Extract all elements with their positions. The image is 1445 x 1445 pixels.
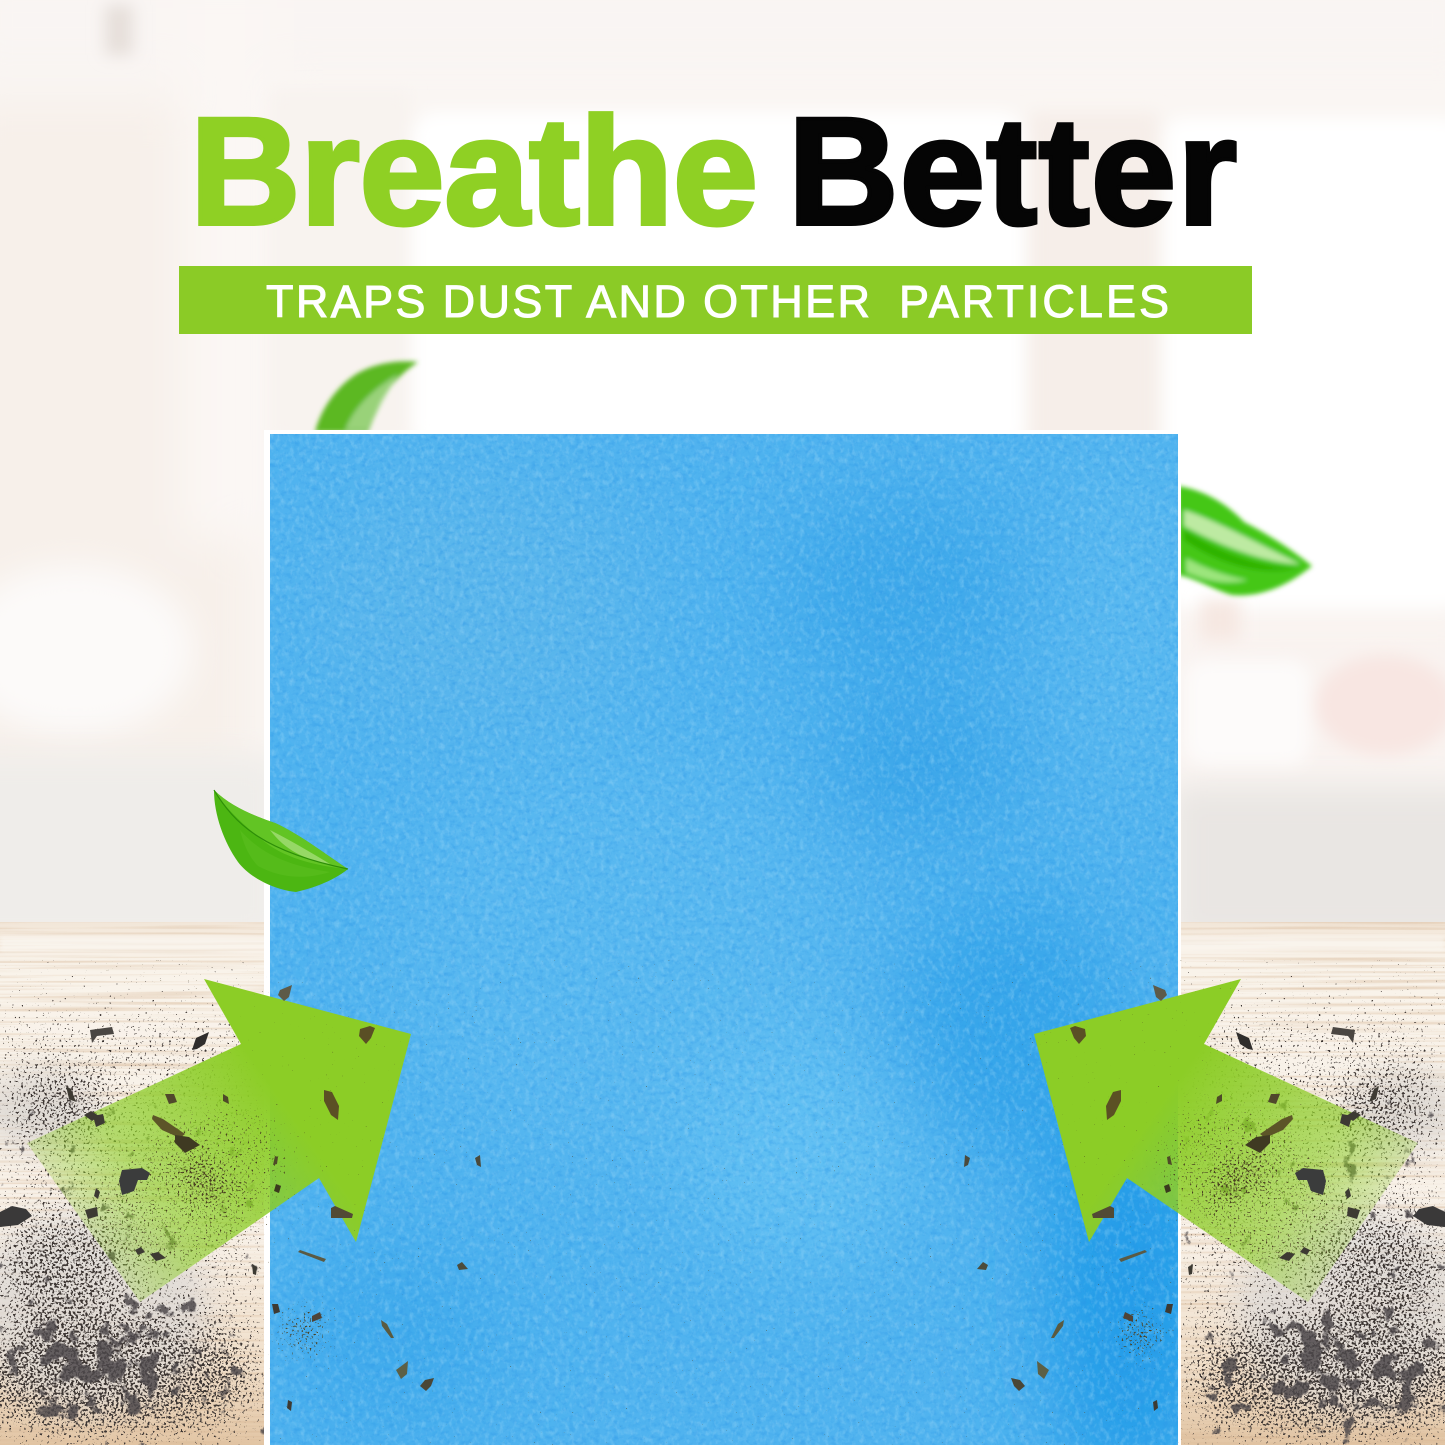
dust specks on table (0, 1010, 1445, 1445)
title word: Better: Better (788, 86, 1237, 257)
title (190, 86, 1237, 257)
large debris flakes right (964, 985, 1445, 1411)
subtitle banner: TRAPS DUST AND OTHER (266, 276, 870, 327)
large debris flakes left (0, 985, 481, 1411)
leaf: top left blurred (315, 361, 418, 432)
particles over arrows and panel (0, 985, 1445, 1411)
pale dust haze (0, 1070, 1445, 1410)
title word: Breathe: Breathe (190, 86, 758, 257)
blurred pillow left (0, 565, 193, 735)
subtitle banner: PARTICLES (899, 276, 1169, 327)
product: blue filter panel (264, 430, 1215, 1445)
leaf: left sharp (214, 790, 348, 892)
leaf: right blurred (1178, 486, 1312, 595)
wooden table with dust (0, 922, 1445, 1445)
arrow: right pointing into filter (1034, 979, 1418, 1302)
arrow: left pointing into filter (27, 979, 411, 1302)
soot clumps on table (0, 1313, 1440, 1411)
subtitle banner (179, 266, 1252, 334)
